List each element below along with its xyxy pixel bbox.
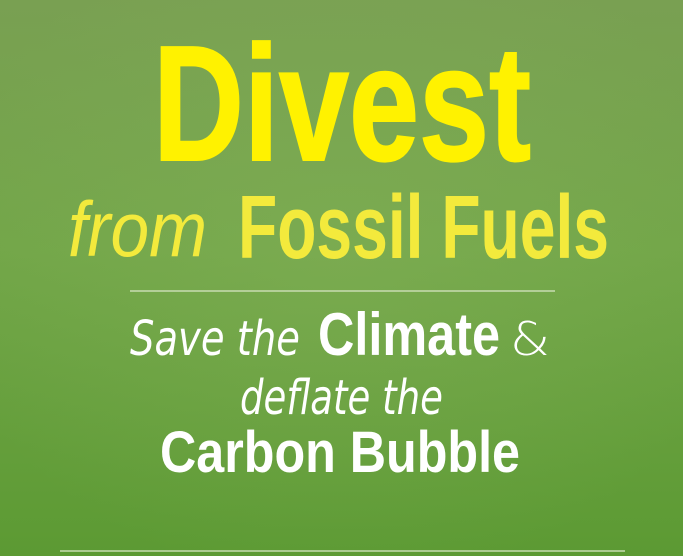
tagline line 2: deflate the: deflate the — [240, 370, 443, 426]
tagline line 1: Save the Climate &: & — [510, 312, 550, 366]
tagline line 1: Save the Climate &: Save the — [130, 311, 300, 367]
tagline line 1: Save the Climate &: Climate — [318, 301, 500, 368]
tagline line 3: Carbon Bubble: Carbon Bubble — [160, 420, 520, 485]
subtitle: from Fossil Fuels: from — [68, 185, 207, 273]
tagline line 1: Save the Climate & — [130, 301, 550, 368]
title: Divest: Divest — [153, 12, 531, 195]
subtitle: from Fossil Fuels — [68, 178, 609, 278]
